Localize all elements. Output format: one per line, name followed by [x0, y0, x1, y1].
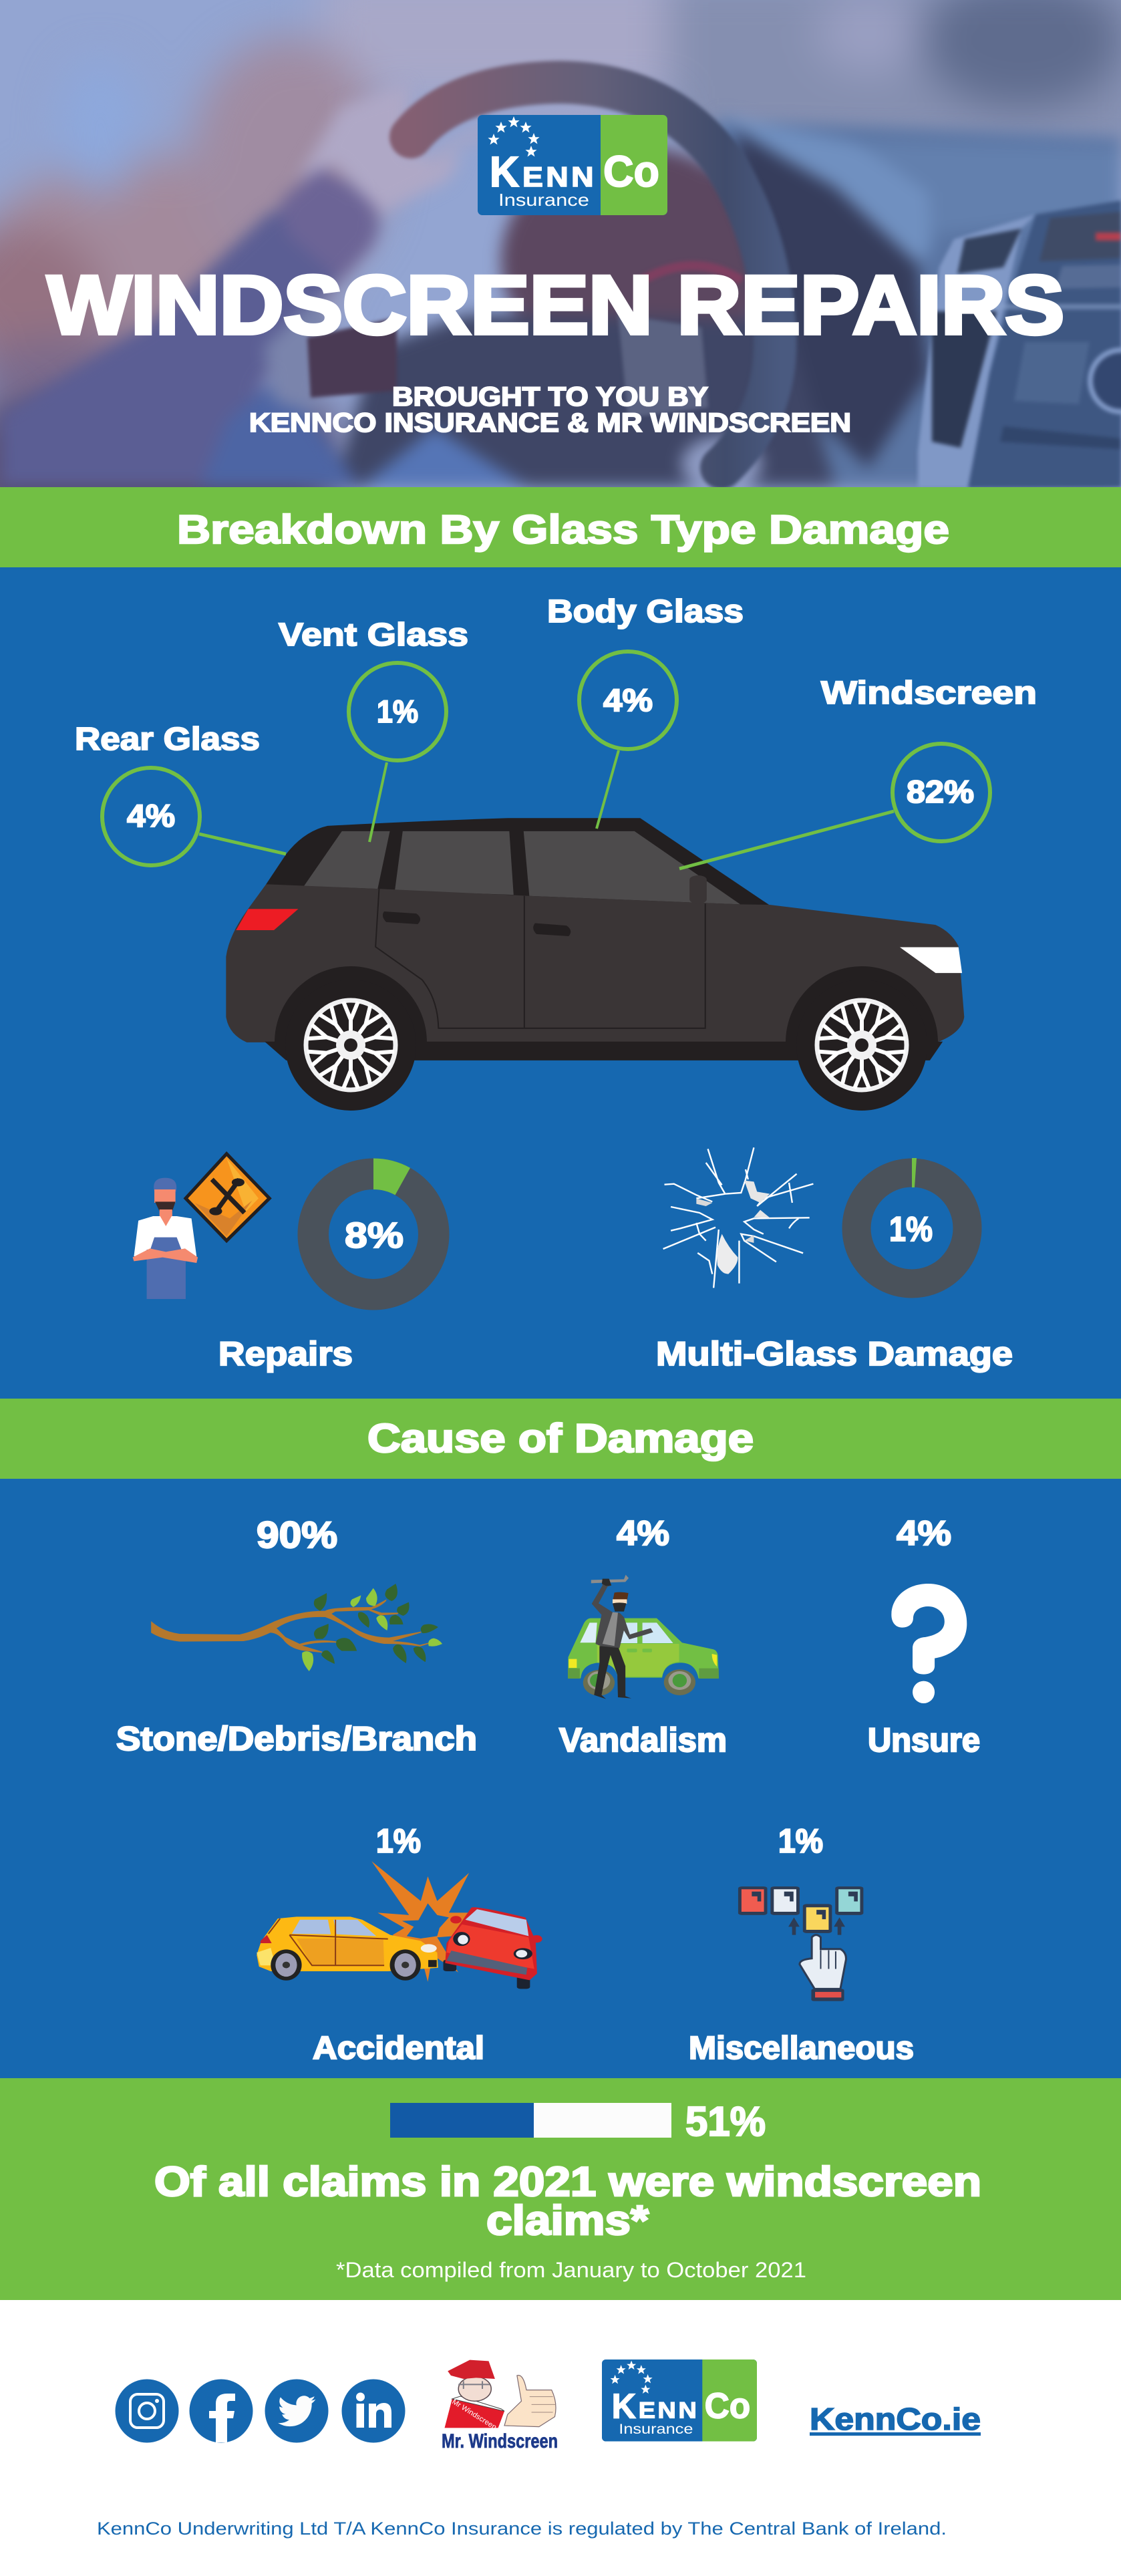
logo: KennCo Insurance footer: Co [705, 2386, 750, 2426]
callout: body glass: 4% [603, 682, 653, 718]
callout: windscreen [679, 676, 1037, 869]
logo: Mr. Windscreen: Mr. Windscreen [442, 2430, 558, 2452]
logo: KennCo Insurance footer [602, 2359, 757, 2442]
logo: KennCo Insurance footer: ENN [639, 2398, 699, 2423]
heading band: cause of damage: Cause of Damage [367, 1416, 754, 1461]
logo: KennCo Insurance footer: K [612, 2387, 636, 2426]
link: KennCo.ie: KennCo.ie [810, 2402, 981, 2436]
callout: windscreen: Windscreen [821, 676, 1037, 711]
progress bar: 51% [390, 2103, 671, 2138]
stat: miscellaneous: Miscellaneous [689, 2031, 914, 2066]
title: WINDSCREEN REPAIRS [47, 259, 1064, 351]
logo: KennCo Insurance header [478, 115, 667, 215]
logo: KennCo Insurance header: K [490, 148, 519, 196]
subtitle: BROUGHT TO YOU BY [392, 382, 708, 412]
logo: KennCo Insurance header: Insurance [498, 190, 589, 210]
panel: 51% claims band: *Data compiled from January to October 2021 [336, 2258, 806, 2282]
stat: miscellaneous: 1% [778, 1822, 823, 1860]
label: repairs: Repairs [218, 1335, 353, 1373]
callout: vent glass [279, 617, 468, 842]
stat: unsure: Unsure [868, 1721, 980, 1759]
stat: unsure: 4% [897, 1514, 951, 1553]
stat: vandalism [559, 1514, 727, 1759]
stat: unsure [868, 1514, 980, 1759]
heading band: breakdown by glass type damage: Breakdown By Glass Type Damage [177, 507, 949, 552]
heading band: cause of damage [0, 1399, 1121, 1479]
panel: 51% claims band: 51% [685, 2099, 766, 2145]
panel: hero header with blurred steering wheel photo [0, 0, 1121, 528]
icon: question mark [891, 1584, 967, 1703]
subtitle: KENNCO INSURANCE & MR WINDSCREEN [249, 408, 851, 438]
stat: stone debris branch [116, 1514, 477, 1757]
icon: vandal with green car [568, 1575, 719, 1699]
icon: facebook [190, 2379, 253, 2443]
panel: 51% claims band: claims* [486, 2198, 649, 2244]
panel: cause of damage background [0, 1479, 1121, 2078]
stat: vandalism: 4% [617, 1514, 669, 1553]
stat: accidental [257, 1822, 542, 2066]
subtitle [249, 382, 851, 438]
callout: body glass [547, 594, 744, 829]
logo: Mr. Windscreen: Mr Windscreen [450, 2398, 498, 2432]
heading band: breakdown by glass type damage [0, 487, 1121, 567]
car illustration [226, 818, 964, 1119]
callout: vent glass: 1% [377, 694, 418, 729]
donut chart: repairs 8% [313, 1159, 434, 1294]
stat: vandalism: Vandalism [559, 1721, 727, 1759]
callout: rear glass: 4% [127, 798, 175, 833]
icon: tree branch [151, 1584, 442, 1671]
logo: KennCo Insurance header: Co [603, 146, 659, 196]
icon: car crash [257, 1861, 542, 1989]
stat: stone debris branch: 90% [257, 1514, 337, 1556]
logo: KennCo Insurance footer: Insurance [619, 2422, 693, 2437]
stat: miscellaneous [689, 1822, 914, 2066]
icon: twitter [265, 2379, 329, 2443]
panel: 51% claims band [0, 2078, 1121, 2300]
donut chart: repairs 8%: 8% [345, 1215, 404, 1256]
logo: KennCo Insurance header: ENN [522, 161, 597, 192]
icon: instagram [115, 2379, 179, 2443]
donut chart: multi-glass 1%: 1% [889, 1210, 933, 1249]
stat: accidental: 1% [376, 1822, 421, 1860]
callout: rear glass: Rear Glass [75, 722, 260, 757]
donut chart: multi-glass 1% [856, 1158, 967, 1284]
panel: 51% claims band: Of all claims in 2021 were windscreen [154, 2159, 981, 2205]
label: multi-glass damage: Multi-Glass Damage [656, 1335, 1013, 1373]
callout: windscreen: 82% [907, 774, 974, 809]
stat: stone debris branch: Stone/Debris/Branch [116, 1720, 477, 1757]
icon: hand selecting cards [738, 1886, 863, 2001]
callout: rear glass [75, 722, 286, 865]
icon: shattered glass [663, 1147, 813, 1288]
panel: glass type background [0, 567, 1121, 1399]
callout: vent glass: Vent Glass [279, 617, 468, 653]
callout: body glass: Body Glass [547, 594, 744, 629]
icon: mechanic with tools sign [133, 1154, 269, 1299]
logo: Mr. Windscreen [442, 2360, 558, 2452]
icon: linkedin [342, 2379, 405, 2443]
stat: accidental: Accidental [313, 2031, 484, 2066]
footer regulatory text: KennCo Underwriting Ltd T/A KennCo Insurance is regulated by The Central Bank of Ireland. [97, 2519, 947, 2539]
